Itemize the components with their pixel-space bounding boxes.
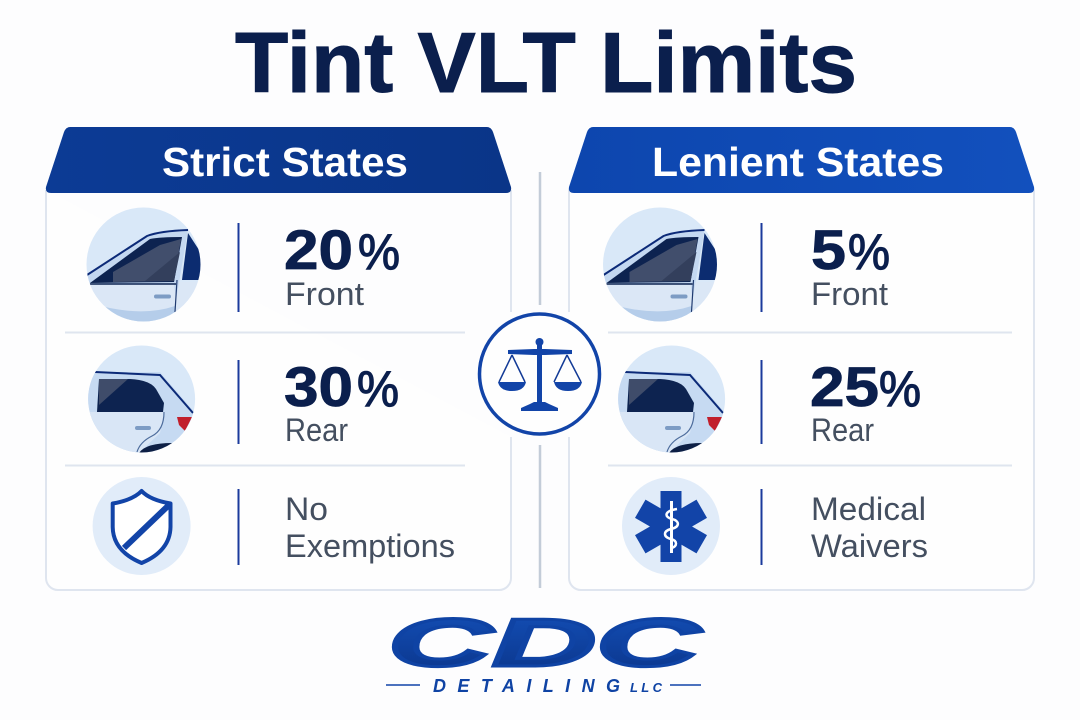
logo: CDC Detailing LLC — [386, 605, 702, 696]
stat: 30% rear: Rear — [285, 412, 348, 448]
logo: CDC Detailing LLC: LLC — [630, 680, 663, 695]
logo: CDC Detailing LLC: DETAILING — [433, 676, 620, 696]
panel outline: lenient — [569, 190, 1034, 590]
logo: CDC Detailing LLC: CDC — [388, 605, 702, 681]
icon: rear car window — [618, 346, 726, 455]
stat: 20% front — [284, 218, 400, 312]
title: Tint VLT Limits — [235, 16, 857, 111]
text: no exemptions — [285, 491, 455, 564]
icon: scales of justice — [480, 314, 600, 434]
icon: front car window — [600, 208, 722, 325]
panel outline: strict — [46, 190, 511, 590]
text: medical waivers: Waivers — [811, 528, 928, 564]
icon: rear car window — [88, 346, 196, 455]
stat: 5% front — [811, 218, 890, 312]
icon: shield no exemptions — [93, 477, 191, 575]
stat: 30% rear: 30 — [284, 355, 353, 418]
text: no exemptions: Exemptions — [285, 528, 455, 564]
icon: front car window — [84, 208, 205, 325]
header: lenient states — [569, 127, 1034, 193]
stat: 25% rear — [810, 355, 921, 448]
panel: lenient states — [569, 127, 1034, 590]
stat: 25% rear: 25 — [810, 355, 879, 418]
stat: 20% front: Front — [285, 276, 364, 312]
header: strict states — [46, 127, 511, 193]
stat: 25% rear: Rear — [811, 412, 874, 448]
text: medical waivers — [811, 491, 928, 564]
stat: 20% front: % — [358, 224, 400, 280]
panel: strict states — [46, 127, 511, 590]
header: strict states: Strict States — [162, 139, 408, 185]
stat: 5% front: % — [848, 224, 890, 280]
stat: 30% rear — [284, 355, 399, 448]
header: lenient states: Lenient States — [652, 139, 944, 185]
icon: star of life — [622, 477, 720, 575]
text: medical waivers: Medical — [811, 491, 926, 527]
stat: 5% front: 5 — [811, 218, 846, 281]
stat: 20% front: 20 — [284, 218, 353, 281]
stat: 30% rear: % — [357, 361, 399, 417]
text: no exemptions: No — [285, 491, 328, 527]
stat: 5% front: Front — [811, 276, 888, 312]
stat: 25% rear: % — [879, 361, 921, 417]
